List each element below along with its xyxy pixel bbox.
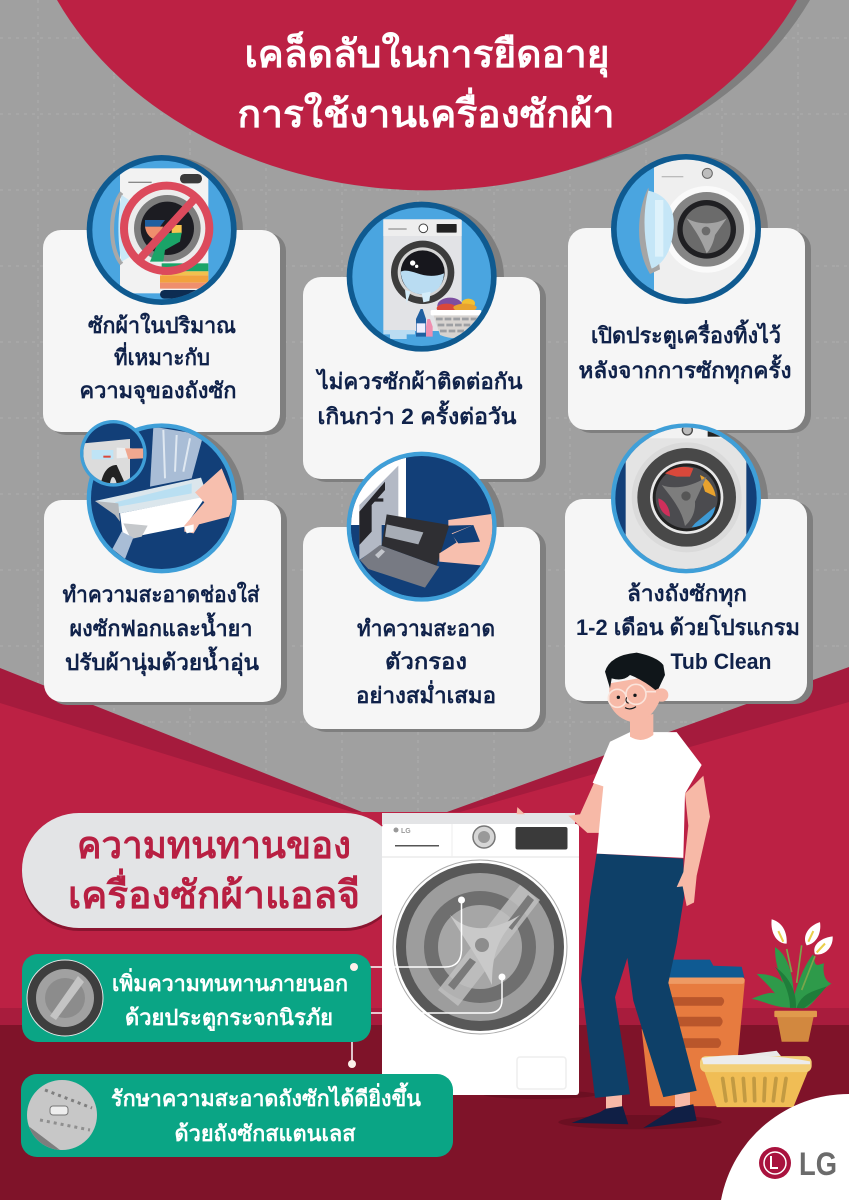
connector lines bbox=[352, 900, 502, 1064]
tip 5 text: ทำความสะอาด bbox=[357, 616, 495, 641]
illustration: shadows bbox=[483, 1090, 722, 1129]
icon shadows bbox=[93, 155, 768, 603]
title: การใช้งานเครื่องซักผ้า bbox=[238, 87, 614, 136]
panel: bottom red backdrop bbox=[0, 667, 849, 1200]
title banner bbox=[57, 0, 810, 190]
connector dot bbox=[348, 1060, 356, 1068]
icon: LG washing machine: LG bbox=[401, 828, 411, 835]
illustration: potted plant bbox=[752, 919, 833, 1042]
icon: LG logo: LG bbox=[799, 1146, 837, 1182]
man: shirt bbox=[593, 732, 702, 858]
title bbox=[238, 31, 614, 136]
tip 4 text: ปรับผ้านุ่มด้วยน้ำอุ่น bbox=[65, 646, 259, 677]
feature 2 text: รักษาความสะอาดถังซักได้ดียิ่งขึ้น bbox=[111, 1082, 421, 1111]
illustration: man body bbox=[517, 732, 710, 1128]
durability heading text: ความทนทานของ bbox=[77, 825, 351, 867]
durability heading text bbox=[68, 825, 360, 917]
panel: tip 5 card bbox=[303, 527, 546, 732]
feature 2 text bbox=[111, 1082, 421, 1146]
tip 3 text: เปิดประตูเครื่องทิ้งไว้ bbox=[591, 319, 781, 350]
icon: cleaning filter bbox=[347, 452, 497, 602]
tip 4 text bbox=[62, 581, 260, 677]
icon: overloaded washer bbox=[87, 155, 237, 305]
tip 6 text: 1-2 เดือน ด้วยโปรแกรม bbox=[576, 614, 800, 640]
panel: tip 2 card bbox=[303, 277, 546, 482]
panel: tip 4 card bbox=[44, 500, 287, 705]
panel: green feature 1 bbox=[22, 954, 371, 1042]
illustration: yellow basket bbox=[700, 1051, 812, 1107]
connector dot bbox=[458, 896, 465, 904]
tip 5 text: ตัวกรอง bbox=[385, 649, 467, 674]
panel: tip 3 card bbox=[568, 228, 811, 433]
durability heading text: เครื่องซักผ้าแอลจี bbox=[68, 868, 360, 917]
tip 1 text: ความจุของถังซัก bbox=[80, 378, 236, 405]
man: arms bbox=[517, 776, 710, 906]
tip 6 text bbox=[576, 581, 800, 674]
tip 2 text: ไม่ควรซักผ้าติดต่อกัน bbox=[315, 368, 522, 394]
tip 3 text: หลังจากการซักทุกครั้ง bbox=[578, 354, 792, 385]
icon: stainless drum thumbnail bbox=[27, 1080, 97, 1150]
tip 1 text: ซักผ้าในปริมาณ bbox=[88, 312, 236, 338]
illustration: man head bbox=[605, 653, 668, 740]
tip 1 text bbox=[80, 312, 236, 405]
tip 5 text: อย่างสม่ำเสมอ bbox=[356, 679, 496, 708]
icon: LG washing machine bbox=[352, 824, 579, 1095]
tip 6 text: ล้างถังซักทุก bbox=[627, 581, 747, 608]
connector dot bbox=[498, 974, 506, 980]
tip 5 text bbox=[356, 616, 496, 708]
panel: durability heading bbox=[22, 813, 575, 931]
panel: tip 1 card bbox=[43, 230, 286, 435]
icon: cleaning detergent drawer bbox=[80, 420, 237, 573]
feature 1 text bbox=[112, 967, 348, 1032]
tip 2 text: เกินกว่า 2 ครั้งต่อวัน bbox=[318, 400, 516, 429]
illustration: orange laundry basket bbox=[642, 960, 745, 1106]
icon: tub clean washer bbox=[611, 423, 761, 573]
illustration: floor objects and man bbox=[483, 919, 833, 1129]
feature 2 text: ด้วยถังซักสแตนเลส bbox=[174, 1121, 356, 1146]
LG logo corner bbox=[721, 1094, 849, 1200]
feature 1 text: เพิ่มความทนทานภายนอก bbox=[112, 967, 348, 996]
title: เคล็ดลับในการยืดอายุ bbox=[244, 31, 610, 78]
inset: drawer close-up bbox=[80, 420, 147, 487]
tip 6 text: Tub Clean bbox=[670, 649, 772, 674]
washer door bbox=[393, 860, 567, 1034]
tip 4 text: ทำความสะอาดช่องใส่ bbox=[62, 581, 260, 607]
tip 1 text: ที่เหมาะกับ bbox=[114, 341, 210, 370]
tip 3 text bbox=[578, 319, 792, 385]
tip 2 text bbox=[315, 368, 522, 429]
tip 4 text: ผงซักฟอกและน้ำยา bbox=[70, 612, 252, 641]
panel: green feature 2 bbox=[21, 1074, 453, 1160]
icon: door thumbnail bbox=[27, 960, 103, 1036]
connector dot bbox=[350, 963, 358, 971]
icon: washer with water and basket bbox=[347, 202, 497, 352]
man: legs bbox=[572, 854, 697, 1128]
icon: open door washer bbox=[611, 154, 764, 304]
feature 1 text: ด้วยประตูกระจกนิรภัย bbox=[125, 1005, 333, 1032]
panel: tip 6 card bbox=[565, 499, 813, 704]
